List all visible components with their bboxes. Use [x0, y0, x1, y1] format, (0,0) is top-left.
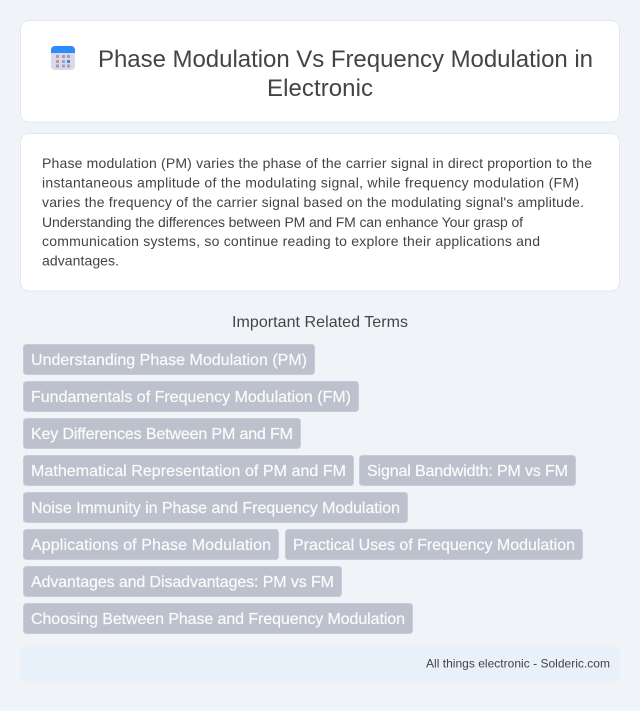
- tag: noise immunity: [24, 492, 408, 522]
- tag: advantages and disadvantages: [24, 566, 342, 596]
- heading: related terms: Important Related Terms: [232, 314, 408, 331]
- panel: intro paragraph: varies the frequency of the carrier signal based on the modulating signal's amplitude.: [42, 194, 584, 210]
- tag list: [24, 344, 582, 634]
- tag: applications of PM: [24, 530, 278, 560]
- footer: All things electronic - Solderic.com: [426, 656, 610, 670]
- tag: signal bandwidth: Signal Bandwidth: PM vs FM: [367, 463, 568, 480]
- title: Phase Modulation Vs Frequency Modulation in: [98, 46, 593, 73]
- panel: intro paragraph: advantages.: [42, 252, 119, 268]
- title: Electronic: [267, 75, 373, 102]
- title: [98, 46, 593, 102]
- tag: signal bandwidth: [360, 456, 576, 486]
- tag: choosing between: Choosing Between Phase and Frequency Modulation: [31, 611, 405, 628]
- footer: [20, 647, 620, 681]
- icon: calendar: [51, 46, 75, 70]
- panel: intro paragraph: instantaneous amplitude of the modulating signal, while frequency modulation (FM): [42, 174, 579, 190]
- tag: noise immunity: Noise Immunity in Phase and Frequency Modulation: [31, 500, 400, 517]
- tag: mathematical representation: Mathematical Representation of PM and FM: [31, 463, 346, 480]
- tag: mathematical representation: [24, 456, 354, 486]
- panel: intro paragraph: [20, 134, 620, 291]
- tag: key differences: Key Differences Between PM and FM: [31, 426, 293, 443]
- tag: understanding PM: [24, 344, 314, 374]
- panel: intro paragraph: Phase modulation (PM) varies the phase of the carrier signal in direct proportion to the: [42, 155, 592, 171]
- tag: key differences: [24, 418, 300, 448]
- tag: advantages and disadvantages: Advantages and Disadvantages: PM vs FM: [31, 574, 334, 591]
- tag: practical uses of FM: Practical Uses of Frequency Modulation: [293, 537, 575, 554]
- tag: practical uses of FM: [286, 530, 582, 560]
- tag: understanding PM: Understanding Phase Modulation (PM): [31, 352, 307, 369]
- panel: intro paragraph: Understanding the differences between PM and FM can enhance Your grasp of: [42, 214, 523, 230]
- panel: title card: [20, 20, 620, 122]
- tag: applications of PM: Applications of Phase Modulation: [31, 537, 271, 554]
- tag: choosing between: [24, 604, 412, 634]
- tag: fundamentals of FM: Fundamentals of Frequency Modulation (FM): [31, 389, 351, 406]
- tag: fundamentals of FM: [24, 382, 358, 412]
- panel: intro paragraph: communication systems, so continue reading to explore their applications and: [42, 233, 540, 249]
